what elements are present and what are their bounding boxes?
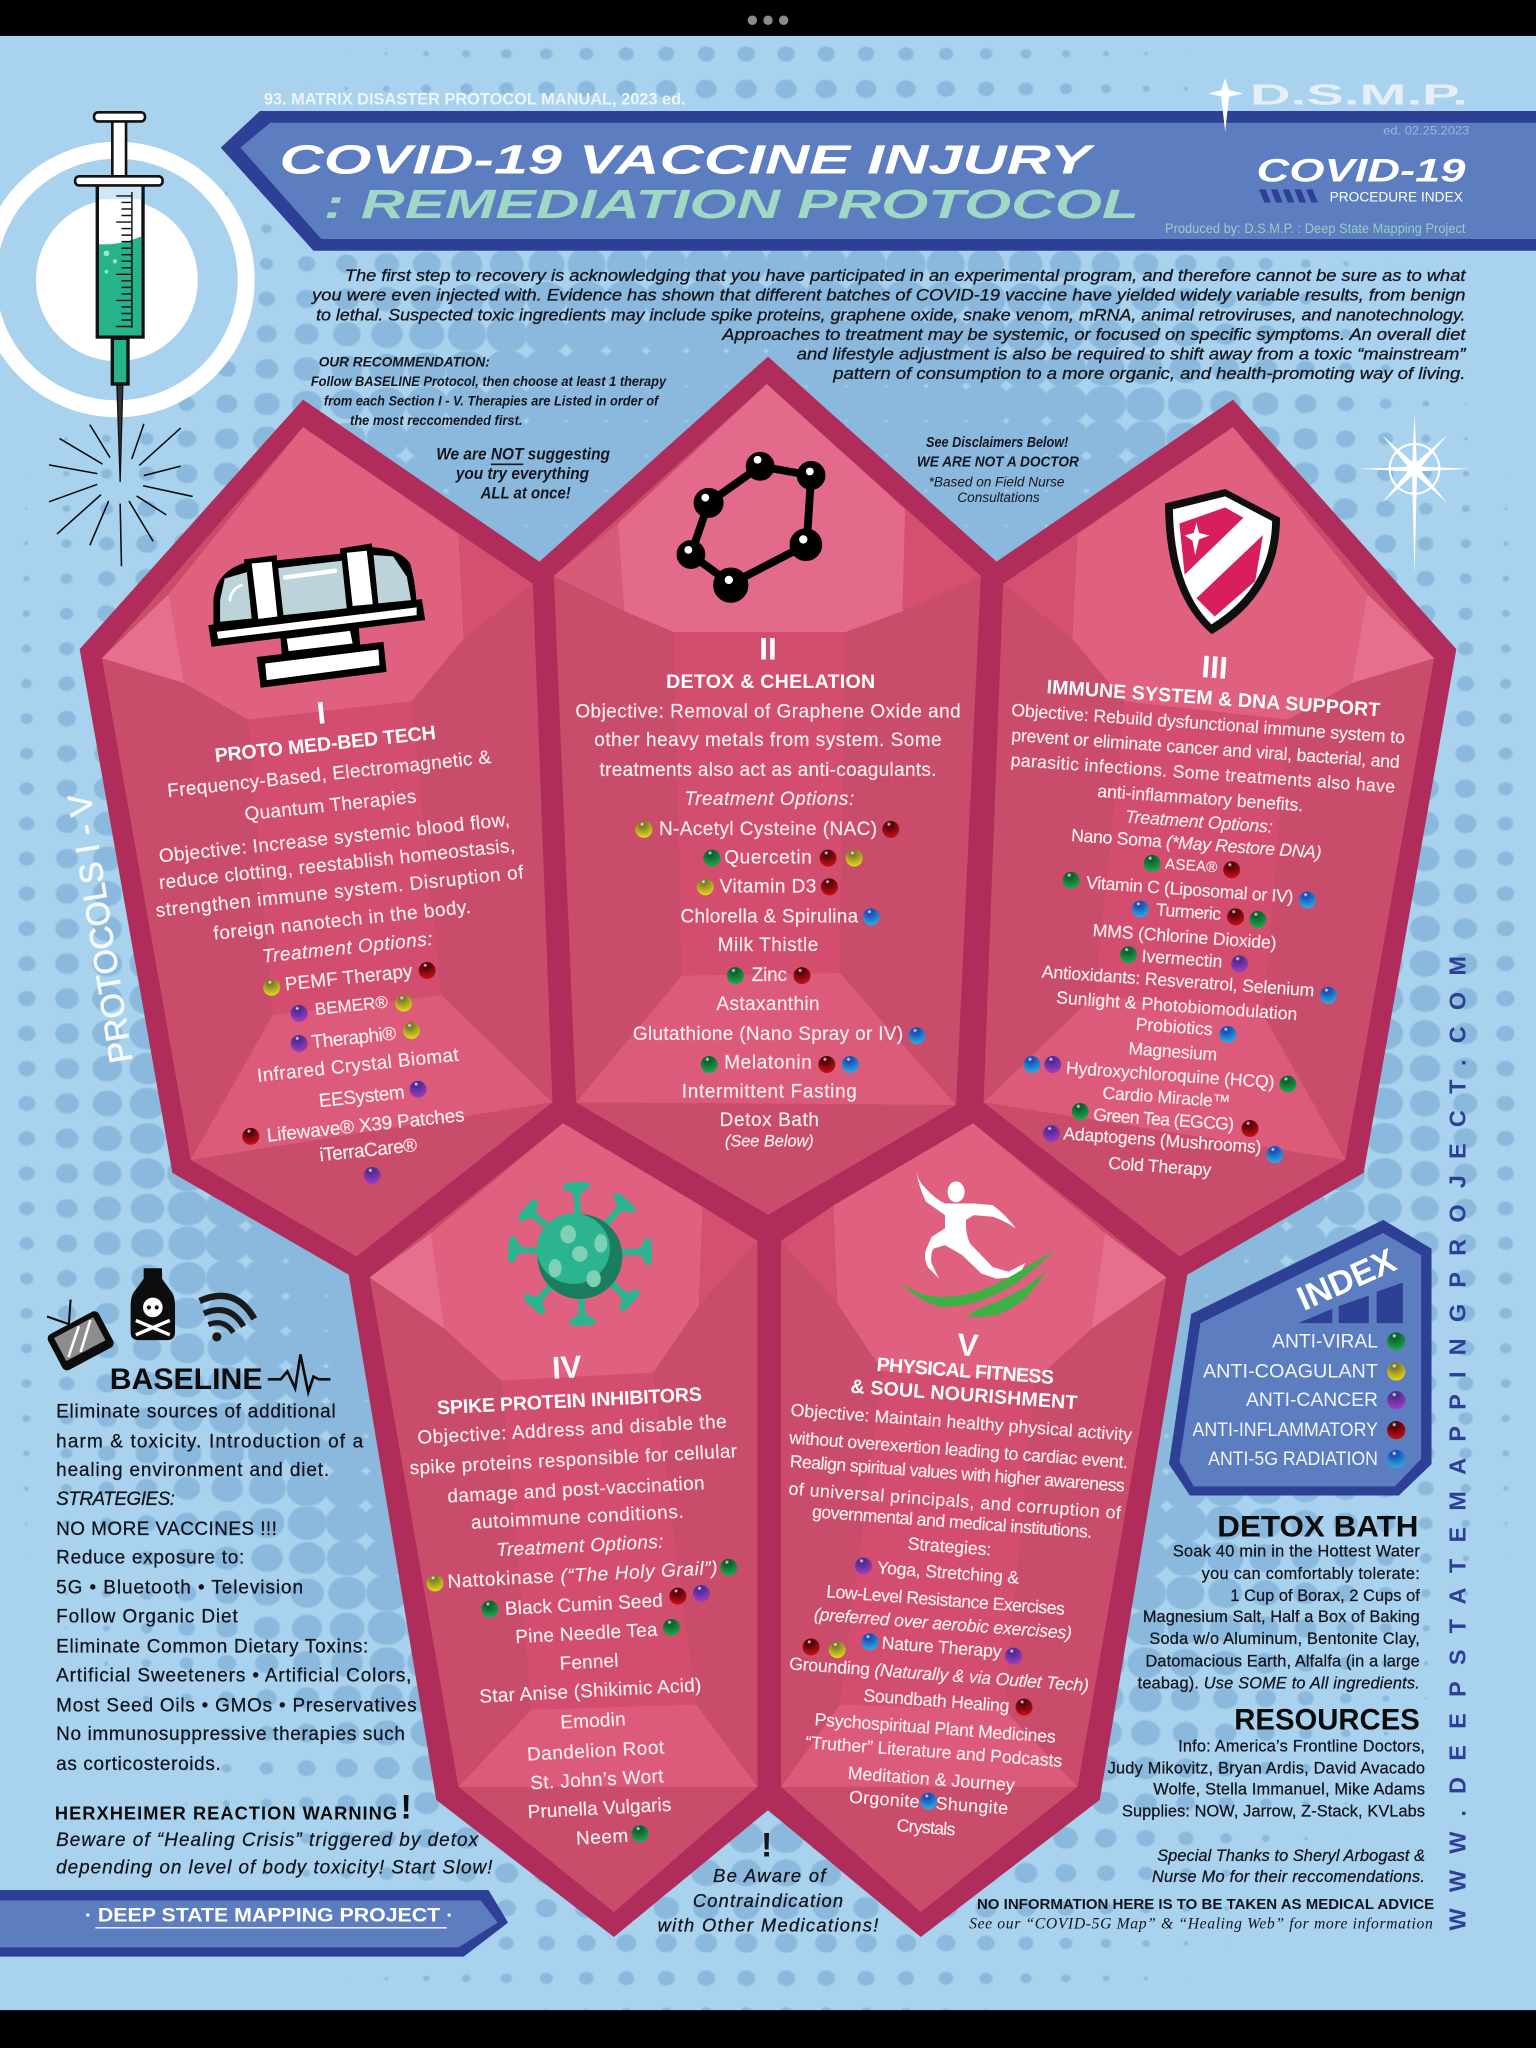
resources: RESOURCES [1234, 1704, 1420, 1737]
manual edition line: 93. MATRIX DISASTER PROTOCOL MANUAL, 2023 ed. [264, 90, 686, 108]
website vertical label: WWW.DEEPSTATEMAPPINGPROJECT.COM [1445, 956, 1471, 1930]
body text: without overexertion leading to cardiac event. [788, 1427, 1129, 1472]
body text: Black Cumin Seed [504, 1591, 663, 1620]
body text [788, 1400, 1133, 1839]
not all at once note [436, 446, 610, 503]
special thanks [1152, 1847, 1425, 1886]
disclaimer note [917, 435, 1079, 505]
contraindication note: Be Aware of [713, 1865, 827, 1886]
body text: Astaxanthin [716, 994, 820, 1015]
index labels: ANTI-VIRAL [1272, 1330, 1378, 1352]
body text: Nano Soma (*May Restore DNA) [1071, 825, 1322, 862]
intro text: pattern of consumption to a more organic, and health-promoting way of living. [832, 364, 1465, 383]
recommendation note [311, 354, 667, 428]
body text: Objective: Maintain healthy physical activity [790, 1400, 1133, 1445]
body text: iTerraCare® [319, 1135, 418, 1166]
baseline text: Reduce exposure to: [56, 1548, 244, 1569]
body text [1010, 700, 1406, 1180]
icon: sparkle star [1358, 414, 1471, 575]
resources: Wolfe, Stella Immanuel, Mike Adams [1153, 1780, 1425, 1798]
body text: strengthen immune system. Disruption of [155, 862, 525, 922]
icon: shield [1165, 489, 1280, 634]
body text: Treatment Options: [261, 929, 434, 968]
special thanks: Nurse Mo for their reccomendations. [1152, 1868, 1425, 1886]
recommendation note: from each Section I - V. Therapies are Listed in order of [324, 393, 660, 408]
body text: “Truther” Literature and Podcasts [805, 1732, 1063, 1771]
body text: Objective: Address and disable the [417, 1412, 727, 1449]
body text: (See Below) [725, 1133, 814, 1151]
body text: Objective: Rebuild dysfunctional immune system to [1011, 700, 1406, 747]
body text: Milk Thistle [718, 935, 818, 956]
icon: runner [901, 1170, 1054, 1317]
body text: Intermittent Fasting [682, 1081, 857, 1102]
title line 2: : REMEDIATION PROTOCOL [324, 181, 1139, 227]
icon: virus [507, 1181, 652, 1326]
not all at once note: ALL at once! [480, 485, 571, 503]
body text: (preferred over aerobic exercises) [813, 1604, 1073, 1643]
body text: Realign spiritual values with higher awareness [789, 1451, 1126, 1496]
baseline text: 5G • Bluetooth • Television [56, 1578, 303, 1599]
index title: INDEX [1292, 1241, 1402, 1318]
title line 1: COVID-19 VACCINE INJURY [280, 136, 1097, 182]
body text: Probiotics [1135, 1014, 1214, 1039]
body text: autoimmune conditions. [470, 1502, 684, 1534]
heading: IMMUNE SYSTEM & DNA SUPPORT [1046, 676, 1381, 721]
heading: DETOX & CHELATION [666, 671, 875, 693]
icon: syringe [75, 112, 163, 482]
heading [850, 1354, 1078, 1414]
herxheimer warning: depending on level of body toxicity! Start Slow! [56, 1857, 493, 1878]
therapy index dots [426, 1559, 737, 1842]
covid-19 procedure index: COVID-19 [1256, 151, 1467, 188]
therapy index dots [803, 1558, 1032, 1810]
body text: parasitic infections. Some treatments also have [1010, 750, 1396, 797]
body text: Grounding (Naturally & via Outlet Tech) [789, 1653, 1090, 1695]
baseline heading: BASELINE [110, 1363, 263, 1396]
body text: Pine Needle Tea [515, 1620, 659, 1648]
body text: Star Anise (Shikimic Acid) [479, 1675, 702, 1708]
body text: Melatonin [724, 1053, 812, 1074]
body text: Glutathione (Nano Spray or IV) [633, 1024, 903, 1045]
disclaimer note: Consultations [957, 490, 1040, 505]
body text: Yoga, Stretching & [877, 1557, 1020, 1588]
body text: Orgonite Shungite [848, 1787, 1009, 1818]
body text: Vitamin D3 [720, 876, 816, 897]
body text: damage and post-vaccination [447, 1473, 705, 1508]
not all at once note: We are NOT suggesting [436, 446, 610, 464]
bottom banner: · DEEP STATE MAPPING PROJECT · [85, 1906, 453, 1927]
index labels: ANTI-5G RADIATION [1208, 1448, 1378, 1470]
detox bath: Datomacious Earth, Alfalfa (in a large [1145, 1652, 1420, 1670]
therapy index dots [635, 821, 925, 1073]
detox bath: 1 Cup of Borax, 2 Cups of [1230, 1587, 1420, 1605]
disclaimer note: WE ARE NOT A DOCTOR [917, 454, 1079, 470]
covid-19 procedure index: PROCEDURE INDEX [1330, 190, 1463, 205]
index legend [1169, 1220, 1432, 1496]
body text: Strategies: [907, 1533, 992, 1559]
baseline text: Eliminate Common Dietary Toxins: [56, 1637, 368, 1658]
body text: N-Acetyl Cysteine (NAC) [659, 819, 877, 840]
intro text: and lifestyle adjustment is also be required to shift away from a toxic “mainstream” [797, 344, 1467, 363]
baseline heading [110, 1354, 330, 1396]
detox bath: DETOX BATH [1217, 1510, 1418, 1543]
therapy index dots [1023, 855, 1337, 1163]
body text: Lifewave® X39 Patches [266, 1105, 466, 1147]
recommendation note: Follow BASELINE Protocol, then choose at least 1 therapy [311, 374, 667, 389]
body text: anti-inflammatory benefits. [1097, 781, 1304, 815]
heading: SPIKE PROTEIN INHIBITORS [437, 1384, 702, 1419]
detox bath: teabag). Use SOME to All ingredients. [1138, 1675, 1420, 1693]
body text: Infrared Crystal Biomat [256, 1045, 460, 1087]
body text: Prunella Vulgaris [527, 1795, 672, 1823]
body text: spike proteins responsible for cellular [409, 1441, 738, 1479]
body text: Quercetin [724, 848, 812, 869]
body text: Objective: Removal of Graphene Oxide and [575, 701, 961, 722]
panel V: physical fitness and soul nourishment [781, 1123, 1166, 1912]
bottom black bar [0, 2010, 1536, 2048]
body text: BEMER® [314, 992, 389, 1019]
body text: Cardio Miracle™ [1102, 1083, 1231, 1112]
body text: MMS (Chlorine Dioxide) [1092, 920, 1277, 953]
body text: Chlorella & Spirulina [680, 906, 859, 927]
contraindication note: with Other Medications! [658, 1915, 878, 1936]
body text: other heavy metals from system. Some [594, 730, 942, 751]
body text: Antioxidants: Resveratrol, Selenium [1041, 961, 1315, 1000]
intro text: you were even injected with. Evidence has shown that different batches of COVID-19 vaccine have yielded widely variable results, from benign [311, 286, 1465, 305]
body text: prevent or eliminate cancer and viral, bacterial, and [1011, 725, 1400, 772]
panel II: detox and chelation [554, 384, 981, 1215]
medical advice disclaimer [969, 1896, 1434, 1932]
numeral I: I [315, 695, 327, 731]
detox bath: Magnesium Salt, Half a Box of Baking [1143, 1608, 1420, 1626]
resources [1108, 1704, 1425, 1821]
body text: EESystem [318, 1082, 406, 1112]
herxheimer warning: Beware of “Healing Crisis” triggered by detox [56, 1830, 480, 1851]
logo: D.S.M.P. [1208, 78, 1468, 132]
body text: Detox Bath [720, 1110, 819, 1131]
numeral II: II [759, 632, 777, 667]
panel III: immune system and DNA support [984, 427, 1434, 1256]
body text: governmental and medical institutions. [811, 1501, 1093, 1542]
body text: ASEA® [1165, 856, 1218, 876]
resources: Supplies: NOW, Jarrow, Z-Stack, KVLabs [1122, 1803, 1425, 1821]
numeral V: V [956, 1327, 980, 1363]
icon: med bed [208, 543, 425, 688]
body text: Soundbath Healing [863, 1685, 1010, 1716]
body text [575, 701, 961, 1151]
icon: molecule [677, 453, 825, 602]
body text: PEMF Therapy [284, 961, 414, 995]
index bars [1298, 1283, 1403, 1323]
index dots [1387, 1332, 1405, 1468]
herxheimer warning: HERXHEIMER REACTION WARNING [55, 1802, 397, 1823]
body text: Meditation & Journey [847, 1763, 1016, 1795]
body text [409, 1412, 738, 1850]
top black bar [0, 0, 1536, 36]
body text: Crystals [896, 1815, 956, 1839]
baseline text: Eliminate sources of additional [56, 1401, 336, 1422]
herxheimer warning: ! [401, 1789, 412, 1827]
body text: foreign nanotech in the body. [213, 897, 472, 945]
icon: puncture sparks [50, 424, 192, 566]
body text: Sunlight & Photobiomodulation [1056, 987, 1298, 1024]
panel IV: spike protein inhibitors [370, 1123, 758, 1912]
baseline text: Most Seed Oils • GMOs • Preservatives [56, 1695, 417, 1716]
contraindication note: ! [761, 1827, 772, 1865]
recommendation note: OUR RECOMMENDATION: [319, 354, 490, 369]
body text: Ivermectin [1141, 946, 1223, 971]
protocols vertical label: PROTOCOLS I - V [60, 791, 139, 1066]
producer credit: Produced by: D.S.M.P. : Deep State Mapping Project [1165, 221, 1466, 236]
heading: PHYSICAL FITNESS [876, 1354, 1055, 1389]
medical advice disclaimer: NO INFORMATION HERE IS TO BE TAKEN AS MEDICAL ADVICE [977, 1896, 1434, 1913]
body text: Frequency-Based, Electromagnetic & [166, 747, 492, 802]
special thanks: Special Thanks to Sheryl Arbogast & [1157, 1847, 1425, 1865]
baseline text: harm & toxicity. Introduction of a [56, 1431, 364, 1452]
index labels: ANTI-INFLAMMATORY [1192, 1419, 1378, 1441]
body text: Vitamin C (Liposomal or IV) [1086, 872, 1294, 907]
body text: reduce clotting, reestablish homeostasis, [158, 836, 516, 894]
bottom banner [0, 1890, 508, 1957]
index labels: ANTI-CANCER [1246, 1389, 1378, 1411]
body text: treatments also act as anti-coagulants. [600, 760, 936, 781]
heading: & SOUL NOURISHMENT [850, 1376, 1078, 1414]
resources: Info: America’s Frontline Doctors, [1178, 1737, 1425, 1755]
body text: of universal principals, and corruption of [788, 1479, 1122, 1523]
baseline text: STRATEGIES: [56, 1489, 175, 1510]
detox bath: Soda w/o Aluminum, Bentonite Clay, [1149, 1630, 1420, 1648]
baseline text: healing environment and diet. [56, 1460, 329, 1481]
numeral IV: IV [551, 1349, 583, 1386]
body text: Dandelion Root [527, 1737, 665, 1766]
baseline text: Artificial Sweeteners • Artificial Colors, [56, 1665, 411, 1686]
baseline icons: tv, poison, wifi [36, 1268, 258, 1372]
body text: Fennel [559, 1651, 619, 1675]
logo: D.S.M.P.: D.S.M.P. [1250, 79, 1468, 111]
baseline text: No immunosuppressive therapies such [56, 1724, 405, 1745]
body text: Zinc [752, 965, 787, 986]
body text: Magnesium [1128, 1038, 1218, 1065]
herxheimer warning [55, 1789, 493, 1878]
baseline text [56, 1401, 417, 1775]
body text [155, 747, 525, 1166]
intro text: The first step to recovery is acknowledging that you have participated in an experimental program, and therefore cannot be sure as to what [345, 266, 1467, 285]
body text: Treatment Options: [496, 1532, 664, 1561]
therapy index dots [242, 962, 436, 1184]
panel I: proto med-bed tech [102, 427, 552, 1256]
target ring [0, 142, 255, 417]
medical advice disclaimer: See our “COVID-5G Map” & “Healing Web” for more information [969, 1915, 1433, 1932]
body text: Cold Therapy [1108, 1153, 1212, 1180]
recommendation note: the most reccomended first. [350, 413, 522, 428]
body text: Nature Therapy [881, 1633, 1003, 1661]
body text: Emodin [560, 1709, 626, 1734]
intro text: to lethal. Suspected toxic ingredients may include spike proteins, graphene oxide, snake venom, mRNA, animal retroviruses, and nanotechnology. [316, 305, 1465, 324]
body text: Objective: Increase systemic blood flow, [158, 810, 511, 867]
body text: Psychospiritual Plant Medicines [814, 1709, 1057, 1747]
intro text: Approaches to treatment may be systemic, or focused on specific symptoms. An overall diet [721, 325, 1467, 344]
contraindication note: Contraindication [693, 1890, 843, 1911]
body text: Adaptogens (Mushrooms) [1063, 1123, 1262, 1157]
index labels [1192, 1330, 1378, 1470]
body text: Neem [575, 1826, 629, 1850]
body text: Hydroxychloroquine (HCQ) [1065, 1058, 1275, 1092]
heading: PROTO MED-BED TECH [214, 722, 437, 767]
resources: Judy Mikovitz, Bryan Ardis, David Avacado [1108, 1759, 1425, 1777]
body text: Treatment Options: [1125, 806, 1273, 837]
baseline text: Follow Organic Diet [56, 1606, 238, 1627]
covid-19 procedure index [1256, 151, 1467, 205]
edition date: ed. 02.25.2023 [1383, 124, 1469, 138]
detox bath: Soak 40 min in the Hottest Water [1173, 1543, 1420, 1561]
body text: Treatment Options: [684, 789, 854, 810]
body text: Quantum Therapies [244, 786, 417, 825]
body text: Low-Level Resistance Exercises [826, 1581, 1066, 1619]
body text: Green Tea (EGCG) [1093, 1104, 1235, 1134]
disclaimer note: *Based on Field Nurse [929, 474, 1065, 489]
index labels: ANTI-COAGULANT [1203, 1360, 1378, 1382]
contraindication note [658, 1827, 878, 1936]
baseline text: NO MORE VACCINES !!! [56, 1519, 277, 1540]
body text: Nattokinase (“The Holy Grail”) [447, 1558, 718, 1593]
baseline text: as corticosteroids. [56, 1754, 221, 1775]
not all at once note: you try everything [455, 465, 589, 483]
detox bath: you can comfortably tolerate: [1202, 1565, 1420, 1583]
disclaimer note: See Disclaimers Below! [926, 435, 1069, 451]
body text: St. John’s Wort [530, 1766, 665, 1794]
numeral III: III [1200, 649, 1229, 686]
crimson gem frame [80, 357, 1456, 1937]
body text: Theraphi® [311, 1023, 397, 1053]
intro text [311, 266, 1467, 383]
body text: Turmeric [1155, 899, 1222, 924]
header banner [221, 90, 1536, 251]
detox bath [1138, 1510, 1420, 1693]
